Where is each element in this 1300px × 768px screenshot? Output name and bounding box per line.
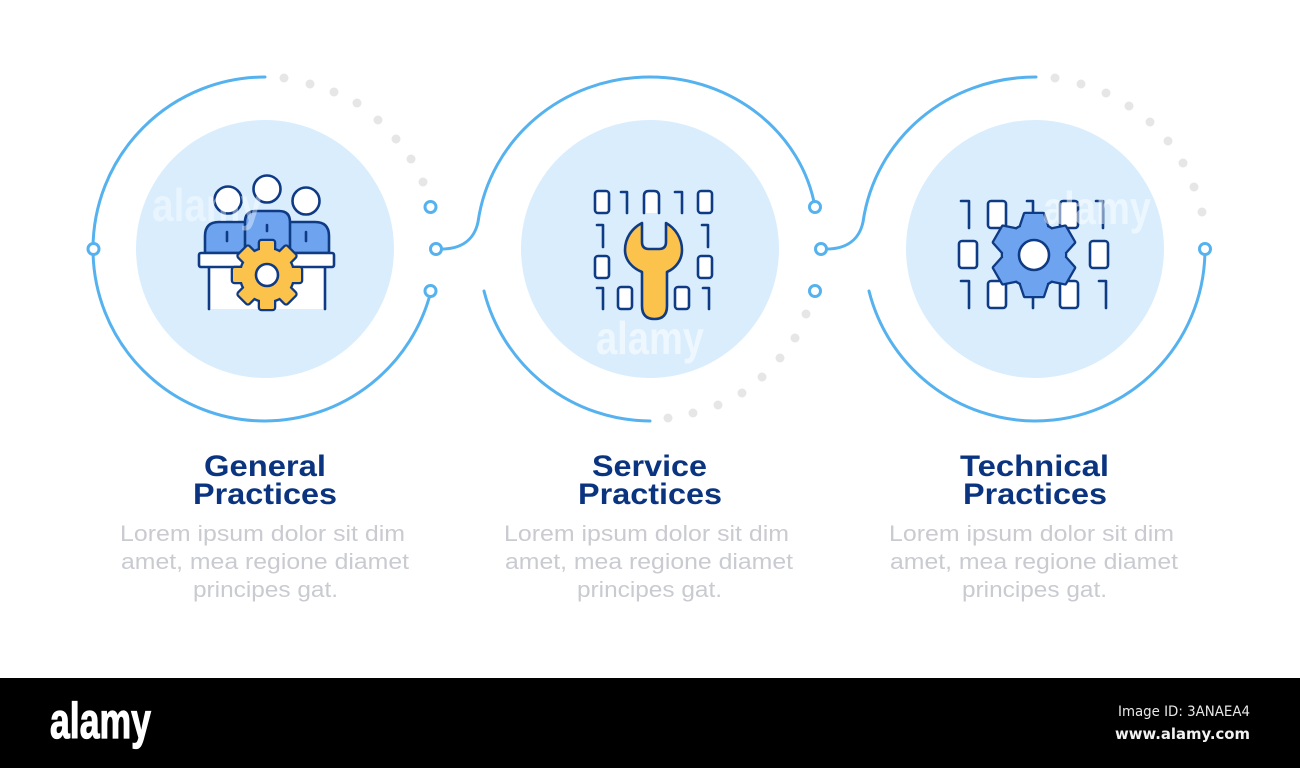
ring: service lower bbox=[484, 291, 650, 421]
body text: general: Lorem ipsum dolor sit dim bbox=[120, 521, 405, 546]
body text: technical: amet, mea regione diamet bbox=[890, 549, 1178, 574]
heading: technical: Practices bbox=[963, 478, 1107, 511]
ring nodes: service bbox=[430, 202, 820, 296]
body text: service: Lorem ipsum dolor sit dim bbox=[504, 521, 789, 546]
image id: Image ID: 3ANAEA4 bbox=[1118, 704, 1250, 720]
body text: general: amet, mea regione diamet bbox=[121, 549, 409, 574]
heading: service: Practices bbox=[578, 478, 722, 511]
heading: service: Service bbox=[592, 450, 707, 483]
panel: service practices bbox=[430, 77, 820, 602]
body text: general: principes gat. bbox=[193, 577, 338, 602]
watermark: general: alamy bbox=[152, 179, 262, 231]
dotted arc: general bbox=[280, 74, 428, 186]
icon: binary code with wrench bbox=[595, 191, 712, 319]
footer logo: alamy bbox=[50, 693, 151, 749]
ring: technical upper with connector bbox=[826, 77, 1036, 249]
panel: technical practices bbox=[816, 74, 1210, 602]
body text: service: principes gat. bbox=[577, 577, 722, 602]
footer bar bbox=[0, 678, 1300, 768]
body text: service: amet, mea regione diamet bbox=[505, 549, 793, 574]
icon: binary code with gear bbox=[959, 201, 1108, 308]
website: www.alamy.com bbox=[1115, 725, 1250, 743]
heading: technical: Technical bbox=[960, 450, 1109, 483]
heading: general: Practices bbox=[193, 478, 337, 511]
ring nodes: general bbox=[88, 202, 436, 296]
disc: service bbox=[521, 120, 779, 378]
ring: service upper with connector bbox=[441, 77, 815, 249]
panel: general practices bbox=[88, 74, 436, 602]
dotted arc: service bbox=[664, 310, 810, 422]
body text: technical: principes gat. bbox=[962, 577, 1107, 602]
body text: technical: Lorem ipsum dolor sit dim bbox=[889, 521, 1174, 546]
ring nodes: technical bbox=[816, 244, 1210, 254]
ring: technical lower bbox=[869, 249, 1205, 421]
ring: general bbox=[93, 77, 431, 421]
disc: technical bbox=[906, 120, 1164, 378]
disc: general bbox=[136, 120, 394, 378]
watermark: technical: alamy bbox=[1043, 182, 1151, 234]
heading: general: General bbox=[204, 450, 326, 483]
icon: team with gear bbox=[199, 176, 334, 309]
watermark: service: alamy bbox=[596, 312, 704, 364]
dotted arc: technical bbox=[1050, 74, 1206, 216]
